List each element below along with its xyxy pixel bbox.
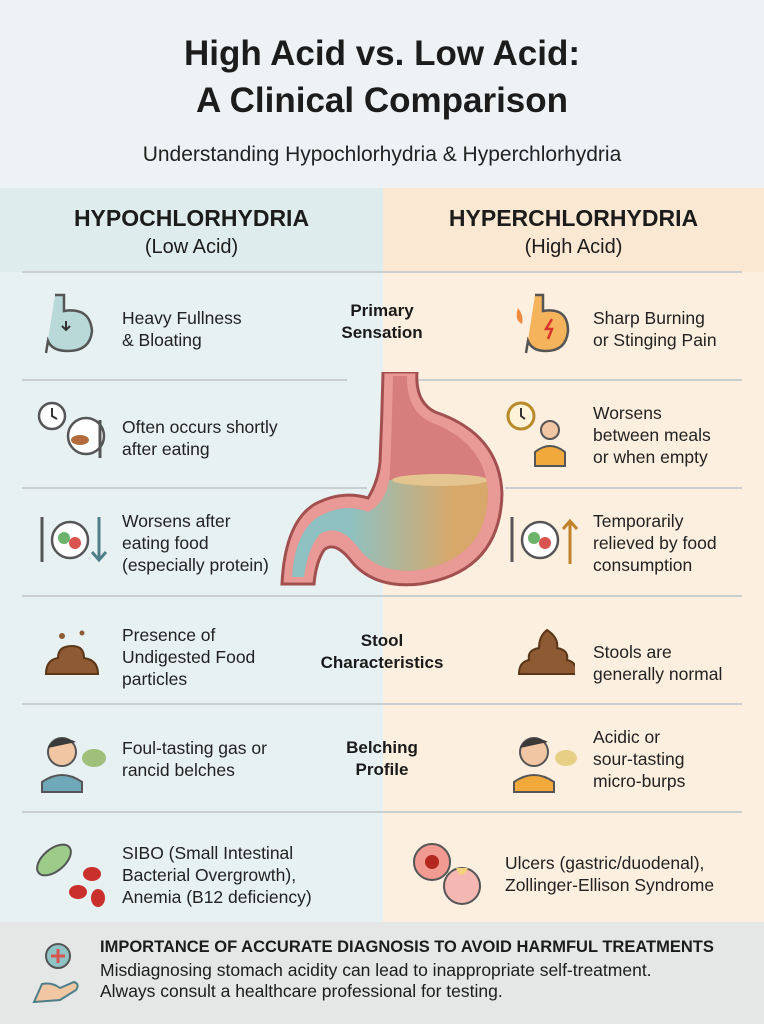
text: heavy fullness — [122, 308, 242, 350]
text: normal stools — [593, 642, 722, 684]
panel: footer — [0, 922, 764, 1024]
icon: clock person — [506, 402, 566, 467]
icon: stomach low — [44, 294, 94, 354]
text: temporarily relieved: Temporarily — [593, 511, 683, 531]
text: foul gas — [122, 738, 267, 780]
icon: person burp — [513, 737, 577, 793]
text: ulcers: Ulcers (gastric/duodenal), — [505, 853, 704, 873]
text: often occurs: Often occurs shortly — [122, 417, 278, 437]
center label: stool: Characteristics — [321, 653, 443, 672]
text: SIBO — [122, 843, 312, 907]
text: ulcers: Zollinger-Ellison Syndrome — [505, 875, 714, 895]
icon: stool lumpy — [45, 630, 99, 675]
text: heavy fullness: Heavy Fullness — [122, 308, 242, 328]
text: normal stools: generally normal — [593, 664, 722, 684]
right header — [383, 188, 764, 272]
text: sharp burning — [593, 308, 717, 350]
text: undigested food: particles — [122, 669, 187, 689]
text: temporarily relieved — [593, 511, 717, 575]
text: foul gas: rancid belches — [122, 760, 235, 780]
right header: HYPERCHLORHYDRIA — [449, 205, 698, 231]
center label: belching — [346, 738, 418, 779]
panel: right column — [383, 188, 764, 922]
text: worsens between meals — [593, 403, 711, 467]
footer text: Always consult a healthcare professional for testing. — [100, 981, 503, 1001]
icon: clock plate — [38, 402, 106, 458]
text: sharp burning: or Stinging Pain — [593, 330, 717, 350]
text: acidic burps: Acidic or — [593, 727, 660, 747]
text: normal stools: Stools are — [593, 642, 672, 662]
text: often occurs — [122, 417, 278, 459]
text: acidic burps: micro-burps — [593, 771, 685, 791]
left header: HYPOCHLORHYDRIA — [74, 205, 309, 231]
text: worsens after eating: (especially protein) — [122, 555, 269, 575]
text: sharp burning: Sharp Burning — [593, 308, 705, 328]
text: acidic burps — [593, 727, 685, 791]
footer text: Misdiagnosing stomach acidity can lead to inappropriate self-treatment. — [100, 960, 652, 980]
text: often occurs: after eating — [122, 439, 210, 459]
title: A Clinical Comparison — [196, 81, 568, 120]
center label: belching: Belching — [346, 738, 418, 757]
illustration: stomach — [280, 372, 504, 586]
panel: left column — [0, 188, 383, 922]
center label: primary sensation — [341, 301, 423, 342]
left header — [0, 188, 383, 272]
center label: primary sensation: Sensation — [341, 323, 423, 342]
icon: plate up — [510, 517, 578, 564]
icon: plate down — [40, 517, 107, 562]
icon: person belch — [41, 737, 106, 793]
title: High Acid vs. Low Acid: — [184, 34, 580, 73]
title — [184, 34, 580, 120]
text: heavy fullness: & Bloating — [122, 330, 202, 350]
right header: (High Acid) — [525, 236, 622, 258]
text: temporarily relieved: relieved by food — [593, 533, 717, 553]
text: ulcers — [505, 853, 714, 895]
text: temporarily relieved: consumption — [593, 555, 692, 575]
text: undigested food: Presence of — [122, 625, 215, 645]
left header: (Low Acid) — [145, 236, 238, 258]
icon: stool normal — [518, 628, 575, 675]
icon: stomach burn — [516, 294, 570, 354]
icon: bacteria cells — [36, 844, 105, 907]
text: SIBO: SIBO (Small Intestinal — [122, 843, 293, 863]
text: worsens between meals: Worsens — [593, 403, 662, 423]
text: foul gas: Foul-tasting gas or — [122, 738, 267, 758]
text: worsens between meals: or when empty — [593, 447, 708, 467]
center label: primary sensation: Primary — [350, 301, 414, 320]
footer text — [100, 960, 652, 1001]
center label: stool — [321, 631, 443, 672]
footer heading: IMPORTANCE OF ACCURATE DIAGNOSIS TO AVOID HARMFUL TREATMENTS — [100, 938, 714, 956]
text: undigested food — [122, 625, 255, 689]
text: worsens after eating: Worsens after — [122, 511, 231, 531]
text: worsens after eating: eating food — [122, 533, 209, 553]
text: worsens after eating — [122, 511, 269, 575]
center label: stool: Stool — [361, 631, 403, 650]
icon: hand with cross — [32, 943, 79, 1004]
subtitle: Understanding Hypochlorhydria & Hyperchlorhydria — [143, 143, 621, 166]
center label: belching: Profile — [356, 760, 408, 779]
text: undigested food: Undigested Food — [122, 647, 255, 667]
text: SIBO: Bacterial Overgrowth), — [122, 865, 296, 885]
icon: ulcers — [413, 843, 481, 905]
text: acidic burps: sour-tasting — [593, 749, 684, 769]
text: worsens between meals: between meals — [593, 425, 711, 445]
text: SIBO: Anemia (B12 deficiency) — [122, 887, 312, 907]
